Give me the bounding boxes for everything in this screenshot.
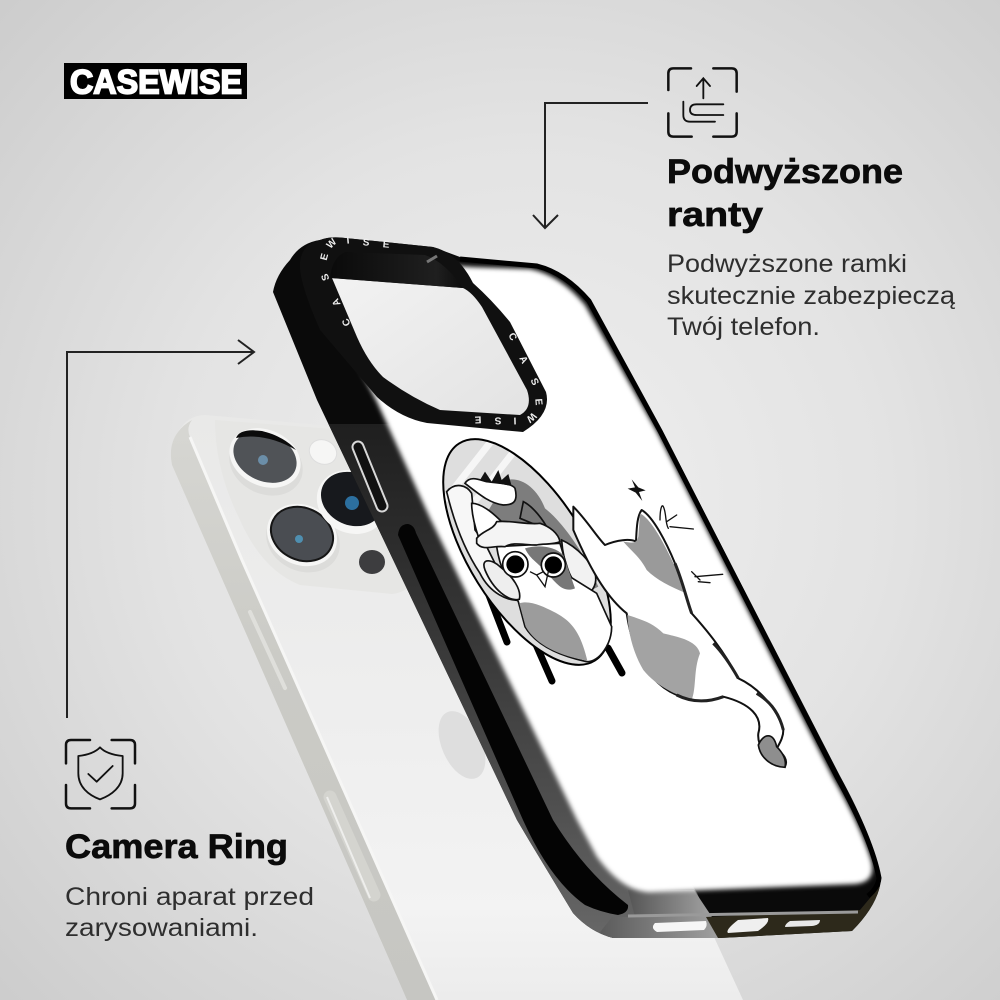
ring lettering: W [325, 236, 340, 251]
ring window [332, 278, 529, 415]
camera lenses [219, 417, 398, 584]
ring lettering: E [382, 239, 390, 251]
text: camera ring description: zarysowaniami. [65, 914, 258, 942]
hood shading [477, 479, 598, 593]
ring lettering: A [516, 354, 530, 366]
ring lettering: E [532, 398, 544, 406]
heading: Podwyższone ranty: ranty [667, 196, 763, 234]
ring lettering: A [330, 296, 344, 308]
ring lettering: I [346, 235, 350, 247]
reflected body [497, 543, 612, 662]
cat dark outline shading [675, 563, 783, 730]
ring lettering: S [362, 237, 370, 249]
reflected eyes [503, 552, 528, 577]
bottom lip left [600, 917, 718, 938]
crown blob [465, 479, 516, 505]
right edge black line [460, 259, 879, 896]
cat back patches [623, 513, 687, 593]
ring lettering: I [513, 414, 517, 426]
bottom lip right [706, 886, 880, 938]
reflected cat [447, 470, 786, 767]
ring lettering: C [505, 331, 519, 343]
mirror oval [442, 438, 612, 666]
port holes [653, 918, 820, 933]
reflected fur [477, 521, 560, 548]
text: camera ring description [65, 883, 314, 942]
reflected ears [472, 503, 503, 537]
icon: apple logo shadow [429, 704, 495, 786]
side slot [327, 797, 374, 898]
reflected belly patch [519, 602, 587, 661]
volume button outline [358, 447, 382, 506]
translucent side frame [328, 424, 700, 938]
camera plateau [215, 420, 415, 594]
text: raised edges description: skutecznie zabezpieczą [667, 282, 955, 310]
text: raised edges description [667, 250, 955, 341]
black phone case [273, 235, 885, 945]
icon: raised edges [668, 68, 737, 137]
ring lettering [319, 235, 544, 426]
icon: shield [66, 740, 135, 808]
main cat body [573, 507, 786, 767]
ring lettering: S [528, 377, 541, 388]
motion marks [660, 506, 723, 583]
heading: Podwyższone ranty: Podwyższone [667, 153, 903, 191]
ring inner wall [330, 252, 463, 288]
right paw [562, 540, 596, 594]
mirror legs [487, 590, 622, 681]
text: camera ring description: Chroni aparat przed [65, 883, 314, 911]
side button [250, 612, 285, 688]
arrow to raised edges [533, 103, 648, 228]
ring lettering: E [319, 252, 331, 262]
heading: Camera Ring: Camera Ring [65, 828, 288, 866]
heading: Podwyższone ranty [667, 153, 903, 234]
text: raised edges description: Twój telefon. [667, 313, 820, 341]
arrow to camera ring [67, 340, 254, 718]
side black strip [398, 524, 628, 915]
ring lettering: S [494, 414, 502, 426]
camera ring [300, 235, 547, 432]
white case back [340, 262, 872, 892]
ring lettering: E [474, 413, 482, 425]
ring lettering: S [320, 272, 332, 282]
illustration: cat and mirror [442, 438, 788, 768]
ring lettering: W [523, 410, 538, 425]
left fur blob [447, 485, 520, 600]
icon: sparkle [628, 479, 646, 501]
left cheek paw [484, 561, 520, 600]
bottom gray section [628, 890, 712, 917]
white phone behind the case [171, 415, 743, 1000]
text: raised edges description: Podwyższone ramki [667, 250, 907, 278]
logo: CASEWISE: CASEWISE [70, 64, 242, 102]
ring lettering: C [340, 316, 354, 328]
phone side rim [171, 420, 437, 1000]
